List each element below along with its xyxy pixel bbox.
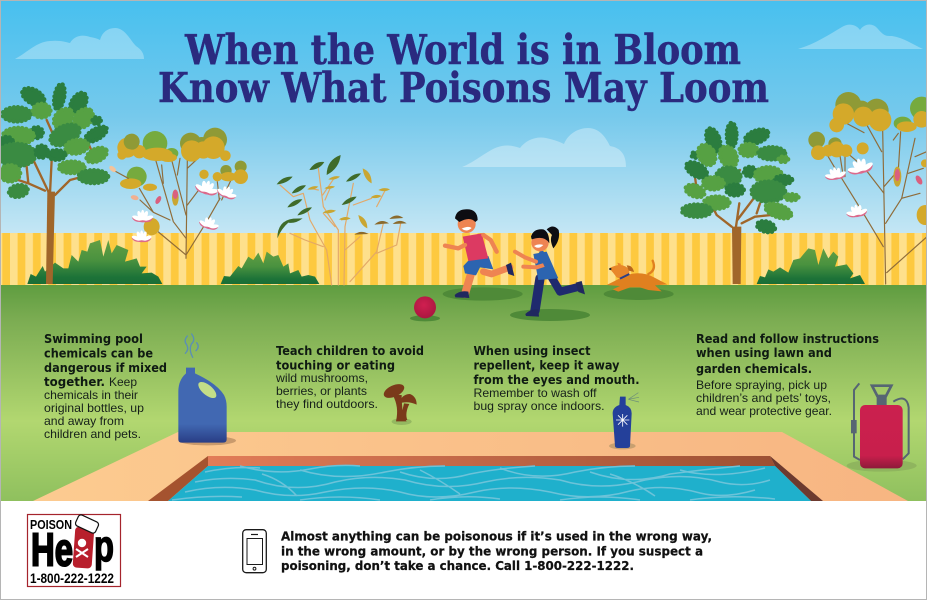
panel: mushrooms text: they find outdoors.: [276, 398, 378, 411]
title: Know What Poisons May Loom: [158, 64, 769, 112]
logo: Poison Help: 1-800-222-1222: [30, 570, 114, 586]
panel: pool chemicals text: and away from: [44, 415, 124, 428]
footer message: [281, 529, 712, 573]
panel: pool chemicals text: dangerous if mixed: [44, 360, 167, 375]
icon: pill bottle with skull: [73, 514, 100, 569]
pool: [148, 456, 823, 501]
panel: pool chemicals text: Swimming pool: [44, 331, 143, 346]
lawn: [0, 285, 927, 501]
panel: mushrooms text: wild mushrooms,: [275, 372, 368, 385]
panel: lawn chemicals text: garden chemicals.: [696, 361, 812, 376]
bush right: [757, 248, 865, 284]
boy: [445, 209, 514, 298]
panel: insect repellent text: from the eyes and mouth.: [474, 372, 640, 387]
cloud middle: [462, 128, 626, 167]
cloud top left: [15, 28, 144, 59]
footer band: [0, 501, 927, 600]
panel: mushrooms text: berries, or plants: [276, 385, 367, 398]
panel: pool chemicals text: together.: [44, 374, 105, 389]
icon: mushrooms: [382, 381, 417, 425]
pool deck: [33, 432, 908, 501]
panel: mushrooms text: touching or eating: [276, 358, 395, 372]
right magnolia tree: [808, 92, 927, 284]
panel: mushrooms text: [275, 343, 424, 411]
panel: mushrooms text: Teach children to avoid: [276, 343, 424, 358]
ground shadows: [410, 287, 674, 321]
icon: garden sprayer: [847, 383, 917, 472]
cloud top right: [798, 25, 923, 49]
footer message: in the wrong amount, or by the wrong person. If you suspect a: [281, 544, 703, 558]
logo: Poison Help: POISON: [30, 517, 72, 532]
icon: chemical jug: [178, 334, 236, 445]
sky background: [0, 0, 927, 233]
children and dog: [410, 209, 674, 321]
bushes: [27, 240, 319, 284]
ball: [414, 296, 436, 318]
left magnolia tree: [108, 128, 248, 258]
girl: [515, 226, 585, 317]
panel: pool chemicals text: chemicals can be: [44, 346, 153, 360]
right green tree: [682, 123, 798, 284]
left green tree: [0, 83, 109, 284]
panel: lawn chemicals text: [696, 331, 879, 418]
panel: lawn chemicals text: Read and follow instructions: [696, 331, 879, 346]
dog: [607, 261, 667, 292]
panel: insect repellent text: [474, 343, 640, 413]
panel: lawn chemicals text: and wear protective gear.: [696, 405, 832, 418]
water ripples: [172, 465, 775, 500]
panel: lawn chemicals text: when using lawn and: [696, 345, 832, 360]
icon: smartphone: [243, 530, 266, 573]
water: [168, 466, 811, 501]
panel: pool chemicals text: original bottles, up: [44, 402, 144, 415]
title: When the World is in Bloom: [184, 26, 741, 74]
title: [158, 26, 769, 112]
panel: insect repellent text: repellent, keep it away: [474, 358, 620, 372]
panel: pool chemicals text: Keep: [109, 376, 137, 389]
panel: insect repellent text: bug spray once indoors.: [474, 400, 604, 413]
logo: Poison Help: He: [31, 524, 73, 576]
panel: pool chemicals text: chemicals in their: [44, 389, 138, 402]
panel: pool chemicals text: [44, 331, 167, 441]
panel: pool chemicals text: children and pets.: [44, 428, 141, 441]
footer message: Almost anything can be poisonous if it’s used in the wrong way,: [281, 529, 712, 544]
logo: Poison Help: [28, 514, 120, 586]
panel: insect repellent text: When using insect: [474, 343, 591, 358]
logo: Poison Help: p: [94, 522, 114, 571]
icon: bug spray: [609, 393, 639, 449]
middle bare plant: [277, 155, 407, 285]
footer message: poisoning, don’t take a chance. Call 1-800-222-1222.: [281, 558, 634, 573]
panel: insect repellent text: Remember to wash off: [474, 387, 597, 400]
fence: [0, 233, 927, 285]
panel: lawn chemicals text: children’s and pets’ toys,: [696, 392, 831, 405]
panel: lawn chemicals text: Before spraying, pick up: [696, 379, 827, 392]
